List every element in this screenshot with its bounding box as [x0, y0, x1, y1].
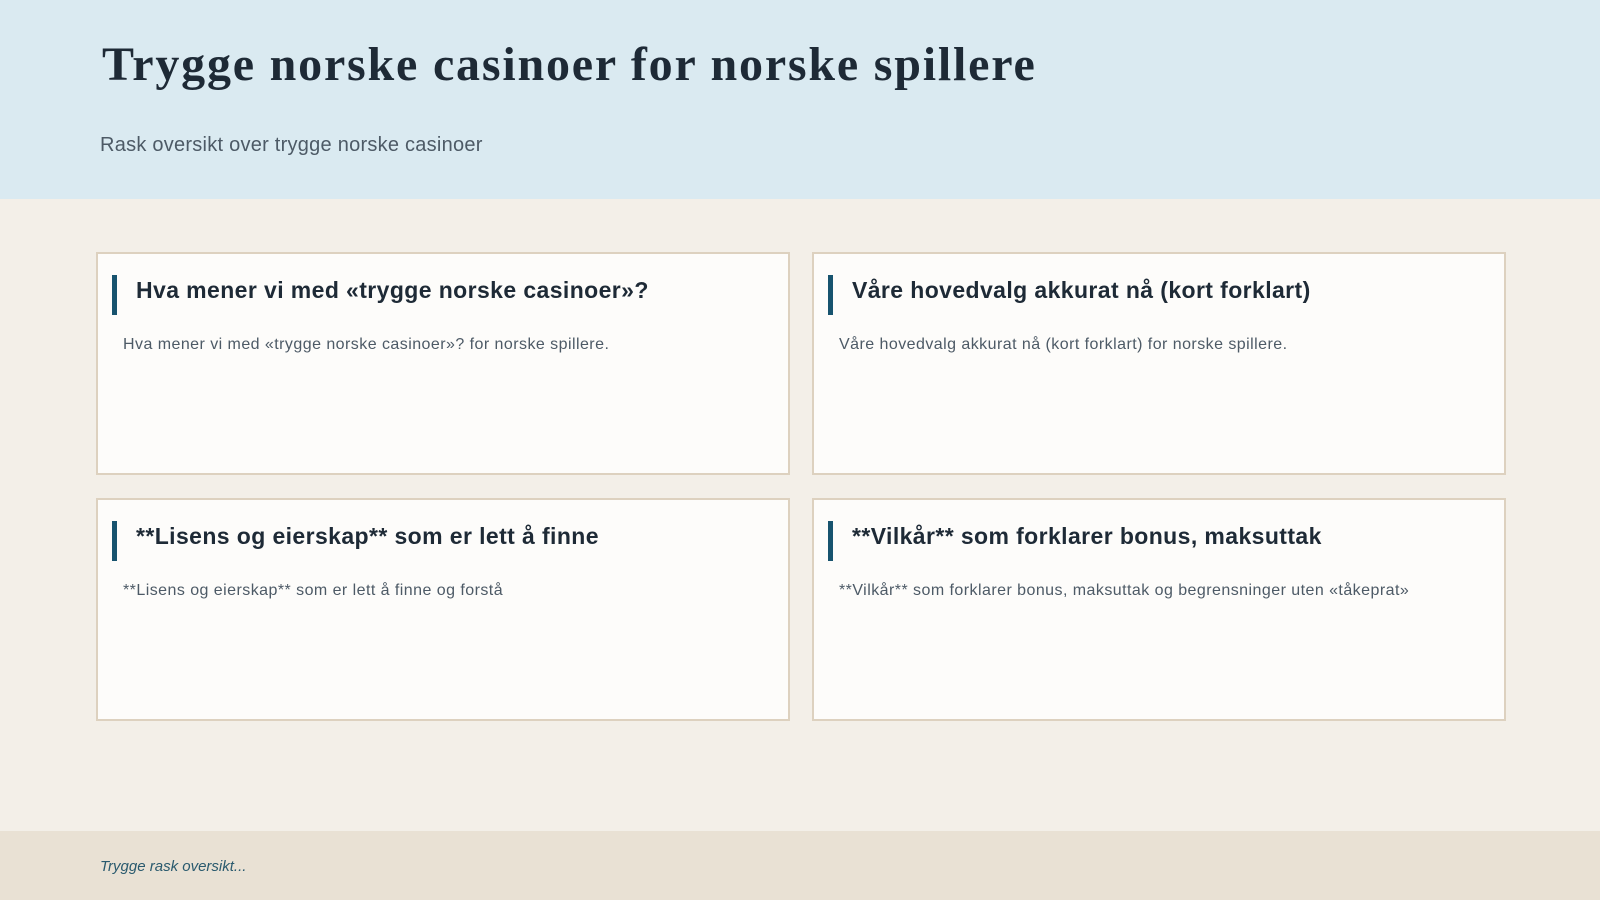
panel: terms — [812, 498, 1506, 721]
footer band — [0, 831, 1600, 900]
heading: **Vilkår** som forklarer bonus, maksuttak — [852, 523, 1322, 549]
heading: Hva mener vi med «trygge norske casinoer»? — [136, 277, 649, 303]
panel: definition — [96, 252, 790, 475]
panel: main picks — [812, 252, 1506, 475]
header band — [0, 0, 1600, 199]
accent bar — [112, 521, 117, 561]
body text: Våre hovedvalg akkurat nå (kort forklart) for norske spillere. — [839, 336, 1288, 353]
heading: Våre hovedvalg akkurat nå (kort forklart) — [852, 277, 1311, 303]
accent bar — [112, 275, 117, 315]
accent bar — [828, 275, 833, 315]
body text: Hva mener vi med «trygge norske casinoer»? for norske spillere. — [123, 336, 609, 353]
title: Trygge norske casinoer for norske spillere — [102, 38, 1037, 91]
subtitle: Rask oversikt over trygge norske casinoer — [100, 134, 483, 156]
heading: **Lisens og eierskap** som er lett å finne — [136, 523, 599, 549]
body text: **Lisens og eierskap** som er lett å finne og forstå — [123, 582, 503, 599]
footer text: Trygge rask oversikt... — [100, 858, 246, 875]
body text: **Vilkår** som forklarer bonus, maksuttak og begrensninger uten «tåkeprat» — [839, 582, 1409, 599]
accent bar — [828, 521, 833, 561]
panel: license — [96, 498, 790, 721]
